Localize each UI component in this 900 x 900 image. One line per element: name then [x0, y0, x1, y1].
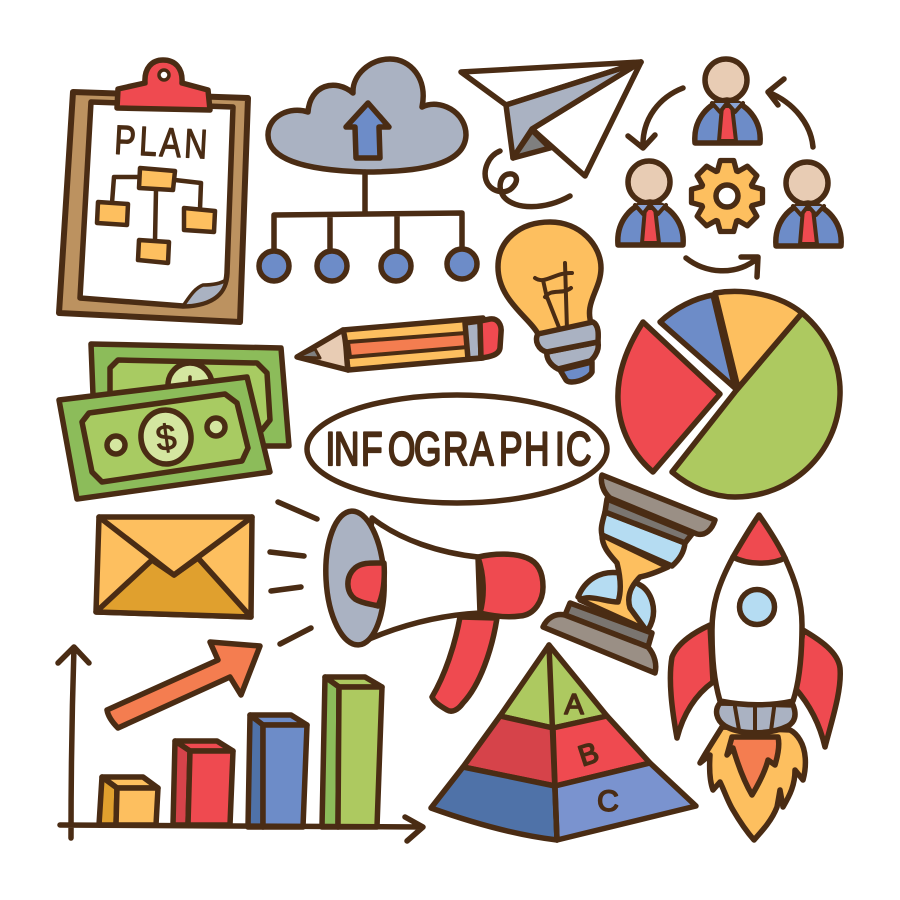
person top [695, 59, 760, 143]
cloud shape [268, 59, 466, 172]
inner cone [348, 563, 384, 606]
red tier right [553, 716, 650, 786]
exhaust ring [717, 703, 795, 733]
flame inner [727, 737, 779, 795]
icon: clipboard plan [59, 60, 248, 322]
red tier left [463, 716, 555, 786]
dollar sign: $ [153, 416, 179, 459]
bar 1 yellow [99, 777, 158, 825]
central oval title [307, 395, 607, 503]
sand [580, 535, 668, 630]
infographic heading: INFOGRAPHIC [326, 422, 591, 475]
rear [478, 554, 543, 617]
label C: C [597, 785, 619, 818]
flowchart [97, 168, 215, 263]
horn opening [323, 510, 387, 646]
icon: megaphone [323, 510, 543, 711]
icon: envelope [96, 517, 252, 617]
front bill [59, 377, 270, 499]
clipboard board [59, 92, 248, 322]
label A: A [564, 689, 584, 721]
paper sheet [80, 102, 233, 306]
bar 3 blue [248, 715, 307, 827]
left fin [670, 625, 713, 738]
lower glass [578, 572, 653, 630]
upper glass [601, 512, 685, 566]
green tier [500, 645, 607, 728]
bar 2 red [173, 741, 233, 825]
gear [691, 160, 763, 232]
handle [432, 617, 497, 711]
flame outer [700, 727, 805, 840]
icon: pyramid chart [431, 645, 696, 840]
clip [117, 60, 210, 110]
centre edge [549, 645, 557, 840]
bar 4 green [322, 677, 382, 827]
icon: cloud network [259, 59, 477, 281]
blue tier right [555, 763, 696, 840]
rocket body [712, 557, 802, 705]
top cap [601, 475, 715, 534]
network lines [274, 172, 462, 250]
icon: hourglass [543, 475, 715, 673]
icon: pencil [297, 318, 501, 370]
sound rays [270, 502, 317, 644]
blue tier left [431, 767, 557, 840]
paper curl [183, 280, 226, 306]
right fin [795, 630, 840, 747]
icon: light bulb [498, 222, 601, 382]
icon: rocket [670, 515, 840, 840]
lower band [565, 603, 652, 647]
nose cone [733, 515, 785, 563]
icon: pie chart [618, 291, 840, 497]
icon: bar chart [58, 642, 423, 841]
clip hole [159, 70, 169, 80]
cycle arrows [628, 79, 813, 277]
axes [58, 647, 423, 841]
growth arrow [107, 642, 260, 728]
icon: paper plane [461, 62, 641, 207]
person right [776, 162, 841, 246]
upload arrow [346, 103, 389, 158]
icon: team cycle [618, 59, 841, 277]
person left [618, 161, 683, 245]
upper band [605, 499, 692, 543]
plan heading: PLAN [113, 117, 209, 167]
horn [360, 518, 480, 643]
label B: B [574, 737, 603, 773]
back bill [91, 344, 289, 446]
network nodes [259, 249, 477, 281]
bottom cap [543, 615, 656, 673]
window [740, 590, 774, 624]
icon: money bills [59, 344, 289, 499]
